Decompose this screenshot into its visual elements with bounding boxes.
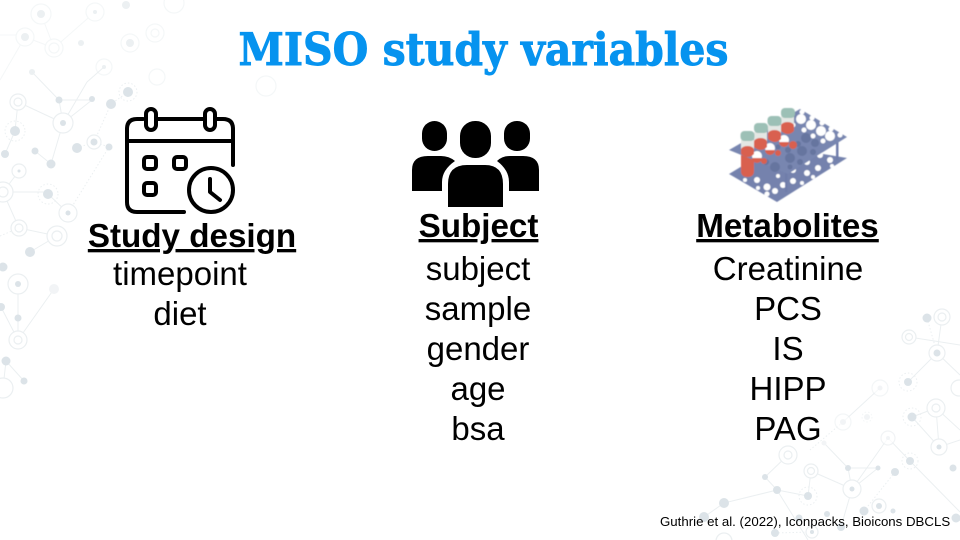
text: metabolite variables: Creatinine xyxy=(713,250,863,287)
background network: bottom right xyxy=(699,309,960,540)
background network: left xyxy=(0,0,276,398)
text: metabolite variables: PCS xyxy=(754,290,822,327)
text: study design variables xyxy=(113,255,247,332)
text: metabolite variables xyxy=(713,250,863,447)
text: study design variables: timepoint xyxy=(113,255,247,292)
text: subject variables: bsa xyxy=(451,410,505,447)
heading: study design: Study design xyxy=(88,218,296,255)
text: metabolite variables: IS xyxy=(772,330,804,367)
text: metabolite variables: PAG xyxy=(754,410,822,447)
text: subject variables: gender xyxy=(427,330,529,367)
text: metabolite variables: HIPP xyxy=(749,370,827,407)
text: subject variables: age xyxy=(450,370,506,407)
citation: Guthrie et al. (2022), Iconpacks, Bioicons DBCLS xyxy=(660,514,950,529)
icon: calendar with clock xyxy=(127,109,233,212)
icon: group of people xyxy=(412,121,539,207)
icon: test tube rack xyxy=(729,108,847,202)
text: subject variables: subject xyxy=(426,250,530,287)
heading: subject: Subject xyxy=(419,208,538,245)
heading: metabolites: Metabolites xyxy=(696,208,879,245)
text: subject variables xyxy=(425,250,531,447)
text: study design variables: diet xyxy=(153,295,207,332)
text: subject variables: sample xyxy=(425,290,531,327)
title: MISO study variables xyxy=(238,23,728,76)
